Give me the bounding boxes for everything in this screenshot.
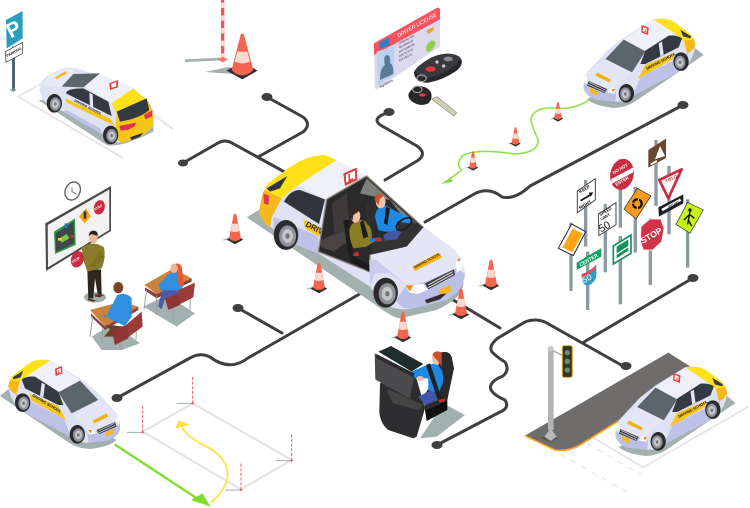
sign: one way <box>658 194 683 217</box>
traffic light <box>540 346 572 442</box>
windshield glass <box>360 178 421 227</box>
instructor: STOP <box>71 256 81 264</box>
car key <box>408 75 457 116</box>
license card: DRIVER LICENSE <box>396 12 439 39</box>
route cones <box>465 102 563 171</box>
hood <box>370 227 465 285</box>
seat <box>423 352 454 410</box>
sign: center street: CENTER <box>579 253 600 268</box>
sign: keep right <box>577 179 595 213</box>
cones around main car <box>222 214 499 342</box>
sign: trail brown <box>648 139 666 168</box>
sign: do not enter: DO NOT <box>612 162 629 175</box>
sign: speed limit <box>596 203 616 236</box>
main car with open door: DRIV <box>304 220 326 237</box>
key fob <box>414 54 462 83</box>
car: bottom right <box>615 366 736 456</box>
shadow <box>247 203 463 318</box>
parking sign: P <box>2 16 25 43</box>
sign: speed limit: 50 <box>596 219 613 235</box>
license card: EXP 2025 12 <box>398 53 413 63</box>
car: bottom left <box>0 359 120 449</box>
car body <box>259 155 465 309</box>
parking outline <box>592 407 748 467</box>
sign: roundabout <box>624 188 651 219</box>
whiteboard <box>45 186 111 271</box>
large cone <box>205 34 258 79</box>
license card: 123 DRIVE ST <box>398 39 415 50</box>
license card: DOB 01 02 03 <box>398 48 414 58</box>
car with green route: top right <box>584 18 704 108</box>
maneuver course <box>115 377 293 507</box>
student one <box>90 282 143 350</box>
license card: ANYTOWN 000 <box>398 43 416 54</box>
floor shadow <box>420 403 465 438</box>
connector lines <box>117 97 693 445</box>
parking sign: PARKING <box>6 47 22 58</box>
rear view car: DRIVING SCHOOL <box>74 99 102 116</box>
sign: keep right: RIGHT <box>578 199 592 210</box>
license plate <box>439 285 451 297</box>
sign: center street <box>577 248 601 270</box>
yellow rear <box>259 155 337 227</box>
sign: speed limit: SPEED <box>598 206 613 217</box>
headlights <box>405 258 463 294</box>
sign: one way: ONE WAY <box>667 199 680 209</box>
door sill <box>351 255 369 272</box>
classroom scene <box>45 179 195 350</box>
sign posts <box>569 140 689 310</box>
yellow arrow <box>176 420 228 503</box>
striped pole <box>185 0 228 62</box>
roof <box>298 160 365 200</box>
driver <box>365 193 414 241</box>
sign: stop <box>639 219 664 250</box>
open door interior <box>318 176 423 272</box>
instructor <box>69 231 106 303</box>
parking scene: top left <box>2 11 173 158</box>
license card: HOWARD SUE <box>398 34 415 45</box>
woman driver <box>412 351 445 405</box>
road signs cluster <box>558 139 703 310</box>
side stripes <box>273 217 318 253</box>
passenger <box>343 207 383 256</box>
license card: signature <box>379 78 394 89</box>
main car with open door <box>247 155 465 318</box>
green arrow <box>115 444 211 507</box>
parking sign <box>2 11 25 92</box>
simulator base <box>379 373 425 438</box>
sign: yield <box>659 169 682 198</box>
rear view car <box>38 67 153 146</box>
back seat <box>321 230 350 252</box>
striped pole and large cone <box>185 0 258 79</box>
sign: interstate 50: 50 <box>580 272 594 285</box>
parking bay lines <box>18 83 173 158</box>
L sign <box>343 168 357 186</box>
sign: do not enter <box>607 157 637 192</box>
sign: keep right: KEEP <box>578 184 591 194</box>
side panel <box>369 260 407 287</box>
rear side window <box>284 190 325 224</box>
driving simulator <box>375 346 465 438</box>
course poles <box>127 377 293 491</box>
asphalt road <box>525 353 693 450</box>
sign: blank orange <box>558 224 586 256</box>
student two <box>143 263 195 327</box>
sign: yield: YIELD <box>664 174 678 184</box>
crossing dashes <box>560 443 642 492</box>
course outline <box>143 403 292 489</box>
traffic road <box>525 346 748 492</box>
sign: stop: STOP <box>639 225 664 246</box>
license card <box>374 8 440 89</box>
sign: bus <box>613 235 631 264</box>
hood sticker: DRIVING SCHOOL <box>414 252 441 269</box>
front bumper <box>397 268 465 309</box>
connector end dots <box>112 93 698 449</box>
driver license and keys <box>374 8 462 116</box>
simulator screens <box>375 346 423 398</box>
sign: pedestrian <box>676 202 703 233</box>
car label: top right: DRIVING SCHOOL <box>646 51 677 71</box>
wall clock <box>62 179 83 203</box>
sign: speed limit: LIMIT <box>599 212 611 222</box>
sign: do not enter: ENTER <box>614 175 630 187</box>
car label: bottom right: DRIVING SCHOOL <box>678 399 709 419</box>
whiteboard: STOP <box>93 203 104 212</box>
green winding route <box>441 100 589 184</box>
wheels <box>274 220 398 308</box>
sign: interstate 50 <box>580 265 596 285</box>
car label: bottom left: DRIVING SCHOOL <box>31 393 63 414</box>
